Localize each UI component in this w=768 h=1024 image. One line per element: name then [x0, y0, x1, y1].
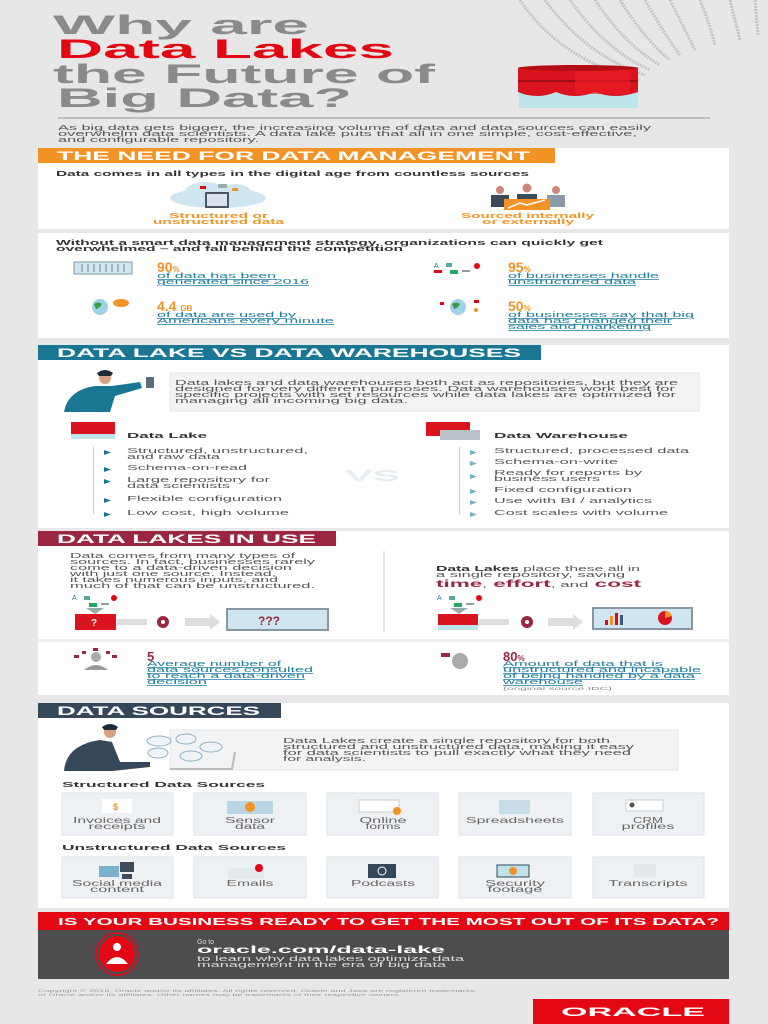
copyright: of Oracle and/or its affiliates. Other names may be trademarks of their respective owners.	[38, 992, 401, 997]
panel: need for data management: Data comes in all types in the digital age from countless sources	[56, 169, 529, 178]
intro text: overwhelm data scientists. A data lake puts that all in one simple, cost-effective,	[58, 129, 637, 138]
cards: structured sources: CRM	[633, 816, 664, 825]
cards: unstructured sources: footage	[488, 885, 544, 894]
intro text: and configurable repository.	[58, 135, 259, 144]
stat: 80%: (original source IDC)	[503, 686, 613, 691]
list: data lake: Structured, unstructured,	[127, 446, 308, 455]
cards: structured sources: Spreadsheets	[466, 816, 564, 825]
panel: need for data management: overwhelmed – and fall behind the competition	[56, 244, 404, 253]
list: data lake	[71, 422, 308, 517]
panel: oracle link: to learn why data lakes optimize data	[197, 954, 466, 963]
panel: oracle link: oracle.com/data-lake	[197, 945, 446, 956]
title: Data Lakes	[57, 34, 394, 64]
banner: call to action	[38, 912, 729, 930]
title	[53, 10, 437, 113]
panel: need for data management	[38, 148, 729, 338]
text box: single repository: for analysis.	[283, 754, 366, 763]
panel: oracle link	[38, 930, 729, 979]
stat: 80%	[441, 649, 701, 691]
heading: data lakes in use	[38, 531, 336, 546]
heading: the need for data management	[38, 148, 555, 163]
logo: oracle: ORACLE	[561, 1005, 705, 1019]
text box	[170, 373, 699, 411]
diagram: with data lake	[437, 595, 692, 630]
list: data warehouse: Structured, processed data	[494, 446, 691, 455]
text: sourced internally	[461, 211, 596, 226]
text: data lakes place these: Data Lakes place these all in	[436, 564, 640, 573]
text: structured or unstructured: Structured or	[169, 211, 268, 220]
stat: 90%: generated since 2016	[157, 277, 309, 286]
text box: managing all incoming big data.	[175, 396, 408, 405]
stat: 4.4 GB: Americans every minute	[157, 316, 334, 325]
cards: unstructured sources: Security	[485, 879, 545, 888]
cards: structured sources: $	[113, 802, 118, 812]
text box: single repository: structured and unstructured data, making it easy	[283, 742, 635, 751]
diagram: without data lake: A	[72, 595, 77, 602]
stat: 80%: of being handled by a data	[503, 671, 697, 680]
text: sourced internally: or externally	[482, 217, 576, 226]
icon: red data lake cylinder	[518, 65, 638, 108]
text: data lakes place these	[436, 564, 642, 590]
stat: 90%	[74, 259, 309, 286]
list: data warehouse: Schema-on-write	[494, 457, 618, 466]
diagram: without data lake: ???	[258, 614, 280, 628]
title: the Future of	[53, 59, 437, 89]
list: data lake: Data Lake	[127, 431, 207, 440]
heading: data lake vs data warehouses: DATA LAKE VS DATA WAREHOUSES	[57, 346, 521, 360]
intro text	[58, 123, 652, 144]
cards: unstructured sources: Transcripts	[608, 879, 688, 888]
cards: structured sources: profiles	[622, 822, 674, 831]
panel: oracle link: Go to	[197, 939, 214, 946]
cards: unstructured sources: Podcasts	[351, 879, 415, 888]
panel: need for data management: Without a smart data management strategy, organizations can quickly get	[56, 238, 604, 247]
cards: structured sources: data	[235, 822, 266, 831]
text: sourced internally: Sourced internally	[461, 211, 596, 220]
cards: unstructured sources: content	[90, 885, 146, 894]
cards: unstructured sources	[62, 857, 704, 898]
title: Big Data?	[57, 83, 352, 113]
stat: 5: 5	[147, 649, 154, 664]
list: data warehouse: Data Warehouse	[494, 431, 628, 440]
list: data lake: and raw data	[127, 452, 222, 461]
icon: cloud with data	[170, 182, 266, 208]
list: data warehouse: Fixed configuration	[494, 485, 632, 494]
stat: 4.4 GB	[92, 298, 334, 325]
banner: call to action: IS YOUR BUSINESS READY TO GET THE MOST OUT OF ITS DATA?	[58, 917, 719, 928]
cards: unstructured sources: Social media	[72, 879, 163, 888]
list: data warehouse	[426, 422, 691, 517]
stat: 80%: 80%	[503, 649, 525, 664]
diagram: without data lake	[72, 595, 328, 630]
text: data comes from many: it takes numerous inputs, and	[70, 575, 278, 584]
text box: single repository	[170, 730, 678, 770]
stat: 5: data sources consulted	[147, 665, 313, 674]
panel: data sources: Unstructured Data Sources	[62, 843, 286, 852]
stat: 5: to reach a data-driven	[147, 671, 305, 680]
text: data comes from many: Data comes from many types of	[70, 551, 297, 560]
stat: 80%: unstructured and incapable	[503, 665, 701, 674]
panel: data sources: Structured Data Sources	[62, 780, 265, 789]
list: data lake: Large repository for	[127, 475, 271, 484]
list: data warehouse: business users	[494, 474, 601, 483]
diagram: without data lake: ?	[91, 618, 97, 629]
stat: 5	[74, 648, 313, 686]
stat: 5: Average number of	[147, 659, 283, 668]
intro text: As big data gets bigger, the increasing volume of data and data sources can easily	[58, 123, 652, 132]
cards: structured sources: receipts	[88, 822, 146, 831]
list: data warehouse: Ready for reports by	[494, 468, 643, 477]
text box: specific projects with set resources while data lakes are optimized for	[175, 390, 677, 399]
text box: designed for very different purposes. Data warehouses work best for	[175, 384, 676, 393]
stat: 50%	[440, 298, 694, 331]
stat: 90%: of data has been	[157, 271, 276, 280]
list: data lake: Low cost, high volume	[127, 508, 289, 517]
stat: 95%: unstructured data	[508, 277, 638, 286]
heading: data sources: DATA SOURCES	[57, 704, 260, 718]
text box: Data lakes and data warehouses both act as repositories, but they are	[175, 378, 678, 387]
heading: data lakes in use: DATA LAKES IN USE	[57, 532, 316, 546]
panel: oracle link: management in the era of big data	[197, 960, 448, 969]
stat: 50%: data has changed their	[508, 316, 673, 325]
stat: 50%: of businesses say that big	[508, 310, 694, 319]
stat: 80%: warehouse	[501, 677, 583, 686]
text box: single repository: Data Lakes create a single repository for both	[283, 736, 610, 745]
stat: 80%: Amount of data that is	[503, 659, 664, 668]
title: Why are	[53, 10, 309, 40]
list: data warehouse: Use with BI / analytics	[494, 496, 653, 505]
heading: data lake vs data warehouses	[38, 345, 541, 360]
cards: structured sources: Invoices and	[73, 816, 161, 825]
cards: structured sources: forms	[366, 822, 400, 831]
stat: 5: decision	[147, 677, 207, 686]
list: data lake: Schema-on-read	[127, 463, 247, 472]
copyright	[38, 988, 475, 997]
text: data comes from many	[68, 551, 316, 590]
cards: structured sources: Sensor	[225, 816, 276, 825]
diagram: with data lake: A	[437, 595, 442, 602]
logo: oracle	[533, 999, 729, 1024]
stat: 4.4 GB: 4.4 GB	[157, 298, 193, 314]
text: data lakes place these: a single repository, saving	[436, 570, 625, 579]
stat: 4.4 GB: of data are used by	[157, 310, 297, 319]
text: data comes from many: sources. In fact, businesses rarely	[70, 557, 316, 566]
icon: person with laptop	[64, 724, 235, 771]
panel: data sources	[38, 703, 729, 908]
icon: red person badge	[96, 933, 138, 975]
text: structured or unstructured	[153, 211, 286, 226]
stat: 50%: 50%	[508, 298, 531, 314]
cards: unstructured sources: Emails	[226, 879, 274, 888]
panel: data lakes in use	[38, 531, 729, 695]
stat: 95%: 95%	[508, 259, 531, 275]
stat: 95%: A	[434, 263, 439, 270]
panel: data lake vs data warehouses	[38, 345, 729, 528]
text: data lakes place these: time , effort , and cost	[436, 579, 642, 590]
text: data comes from many: come to a data-driven decision	[70, 563, 292, 572]
cards: structured sources	[62, 793, 704, 835]
icon: people with chart	[491, 184, 565, 210]
list: data lake: Flexible configuration	[127, 494, 282, 503]
text: structured or unstructured: unstructured data	[153, 217, 286, 226]
text: data comes from many: with just one source. Instead,	[68, 569, 276, 578]
stat: 90%: 90%	[157, 259, 180, 275]
text: VS: VS	[345, 468, 401, 485]
heading: the need for data management: THE NEED FOR DATA MANAGEMENT	[57, 149, 531, 163]
stat: 50%: sales and marketing	[508, 322, 651, 331]
text box: single repository: for data scientists to pull exactly what they need	[283, 748, 631, 757]
text: data comes from many: much of that can be unstructured.	[70, 581, 315, 590]
icon: person with phone	[64, 370, 154, 412]
list: data warehouse: Cost scales with volume	[494, 508, 668, 517]
copyright: Copyright © 2018, Oracle and/or its affiliates. All rights reserved. Oracle and Java are registered trademarks	[38, 988, 475, 993]
list: data lake: data scientists	[127, 481, 231, 490]
stat: 95%: of businesses handle	[508, 271, 659, 280]
cards: structured sources: Online	[360, 816, 408, 825]
heading: data sources	[38, 703, 281, 718]
decoration: binary arcs	[520, 0, 758, 80]
stat: 95%	[434, 259, 659, 286]
